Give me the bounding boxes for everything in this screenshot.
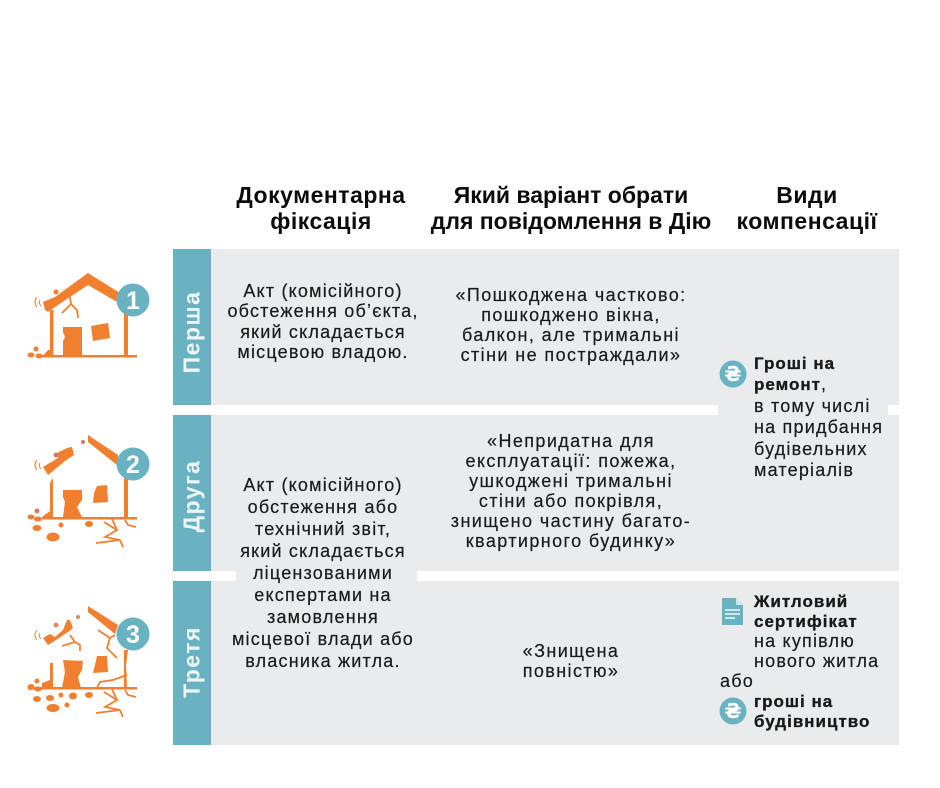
text: act or technical report, rows 2-3: місцевої влади або [232, 629, 414, 649]
icon: document [722, 598, 743, 625]
text: partially damaged [455, 285, 687, 366]
icon: hryvnia coin, repair: ₴ [724, 362, 742, 386]
text: housing certificate: Житловий [754, 592, 848, 611]
row label: first [173, 249, 211, 405]
text: housing certificate: сертифікат [754, 612, 858, 631]
text: fully destroyed: повністю» [523, 661, 619, 681]
text: partially damaged: «Пошкоджена частково: [455, 285, 687, 305]
icon: hryvnia coin, construction: ₴ [724, 699, 742, 723]
text: act of commission inspection, row 1: Акт (комісійного) [243, 281, 403, 301]
text: act or technical report, rows 2-3: технічний звіт, [255, 519, 391, 539]
heading: which option to choose [430, 182, 711, 234]
text: or: або [720, 671, 754, 691]
text: housing certificate [754, 592, 879, 671]
text: money for repair: в тому числі [754, 396, 871, 416]
text: unfit for use: «Непридатна для [487, 431, 655, 451]
heading: documentary record [236, 182, 406, 234]
text: partially damaged: стіни не постраждали» [461, 345, 681, 365]
icon: destroyed house, number 3: 3 [126, 621, 140, 649]
text: unfit for use [451, 431, 691, 552]
text: unfit for use: ушкоджені тримальні [469, 471, 673, 491]
text: act of commission inspection, row 1: місцевою владою. [237, 342, 409, 362]
text: act or technical report, rows 2-3: експертами на [254, 585, 392, 605]
text: act or technical report, rows 2-3: Акт (комісійного) [243, 475, 403, 495]
text: act or technical report, rows 2-3 [232, 475, 414, 671]
text: act or technical report, rows 2-3: власника житла. [245, 651, 401, 671]
icon: house with serious damage, number 2 [28, 435, 150, 548]
text: housing certificate: на купівлю [754, 631, 855, 651]
text: act or technical report, rows 2-3: ліцензованими [253, 563, 393, 583]
heading: compensation types [737, 182, 878, 234]
text: money for repair: матеріалів [754, 460, 854, 480]
text: fully destroyed: «Знищена [523, 641, 619, 661]
text: money for repair: Гроші на [754, 354, 835, 373]
text: money for construction: гроші на [754, 692, 833, 711]
icon: destroyed house, number 3 [28, 606, 150, 718]
heading: documentary record: Документарна [236, 182, 406, 208]
text: partially damaged: пошкоджено вікна, [481, 305, 661, 325]
icon: hryvnia coin, repair [720, 360, 746, 388]
text: act or technical report, rows 2-3: який складається [240, 541, 406, 561]
row label: third [173, 581, 211, 745]
text: money for construction [754, 692, 870, 731]
text: act of commission inspection, row 1 [227, 281, 419, 362]
text: unfit for use: стіни або покрівля, [479, 491, 663, 511]
text: fully destroyed [523, 641, 619, 681]
heading: compensation types: Види [776, 182, 838, 208]
row label: second: Друга [178, 460, 204, 532]
heading: which option to choose: Який варіант обрати [454, 182, 688, 208]
text: money for repair: будівельних [754, 439, 868, 459]
row label: third: Третя [178, 626, 204, 697]
text: unfit for use: експлуатації: пожежа, [466, 451, 676, 471]
icon: house with serious damage, number 2: 2 [126, 451, 140, 479]
text: money for repair: на придбання [754, 417, 883, 437]
text: money for repair [754, 354, 883, 480]
text: unfit for use: квартирного будинку» [466, 531, 676, 551]
heading: compensation types: компенсації [737, 208, 877, 234]
row label: first: Перша [178, 291, 204, 373]
heading: which option to choose: для повідомлення в Дію [431, 208, 711, 234]
icon: house with minor damage, number 1 [28, 273, 150, 358]
row label: second [173, 415, 211, 571]
text: money for construction: будівництво [754, 712, 870, 731]
text: housing certificate: нового житла [754, 651, 879, 671]
text: act of commission inspection, row 1: обстеження об’єкта, [227, 301, 419, 321]
heading: documentary record: фіксація [270, 208, 372, 234]
text: act or technical report, rows 2-3: замовлення [267, 607, 379, 627]
icon: hryvnia coin, construction [720, 698, 746, 724]
icon: house with minor damage, number 1: 1 [126, 287, 140, 315]
panel: grey table background [211, 249, 899, 745]
text: money for repair: ремонт, [754, 374, 827, 394]
text: act of commission inspection, row 1: який складається [240, 322, 406, 342]
text: act or technical report, rows 2-3: обстеження або [248, 497, 398, 517]
text: unfit for use: знищено частину багато- [451, 511, 691, 531]
text: partially damaged: балкон, але тримальні [462, 325, 680, 345]
